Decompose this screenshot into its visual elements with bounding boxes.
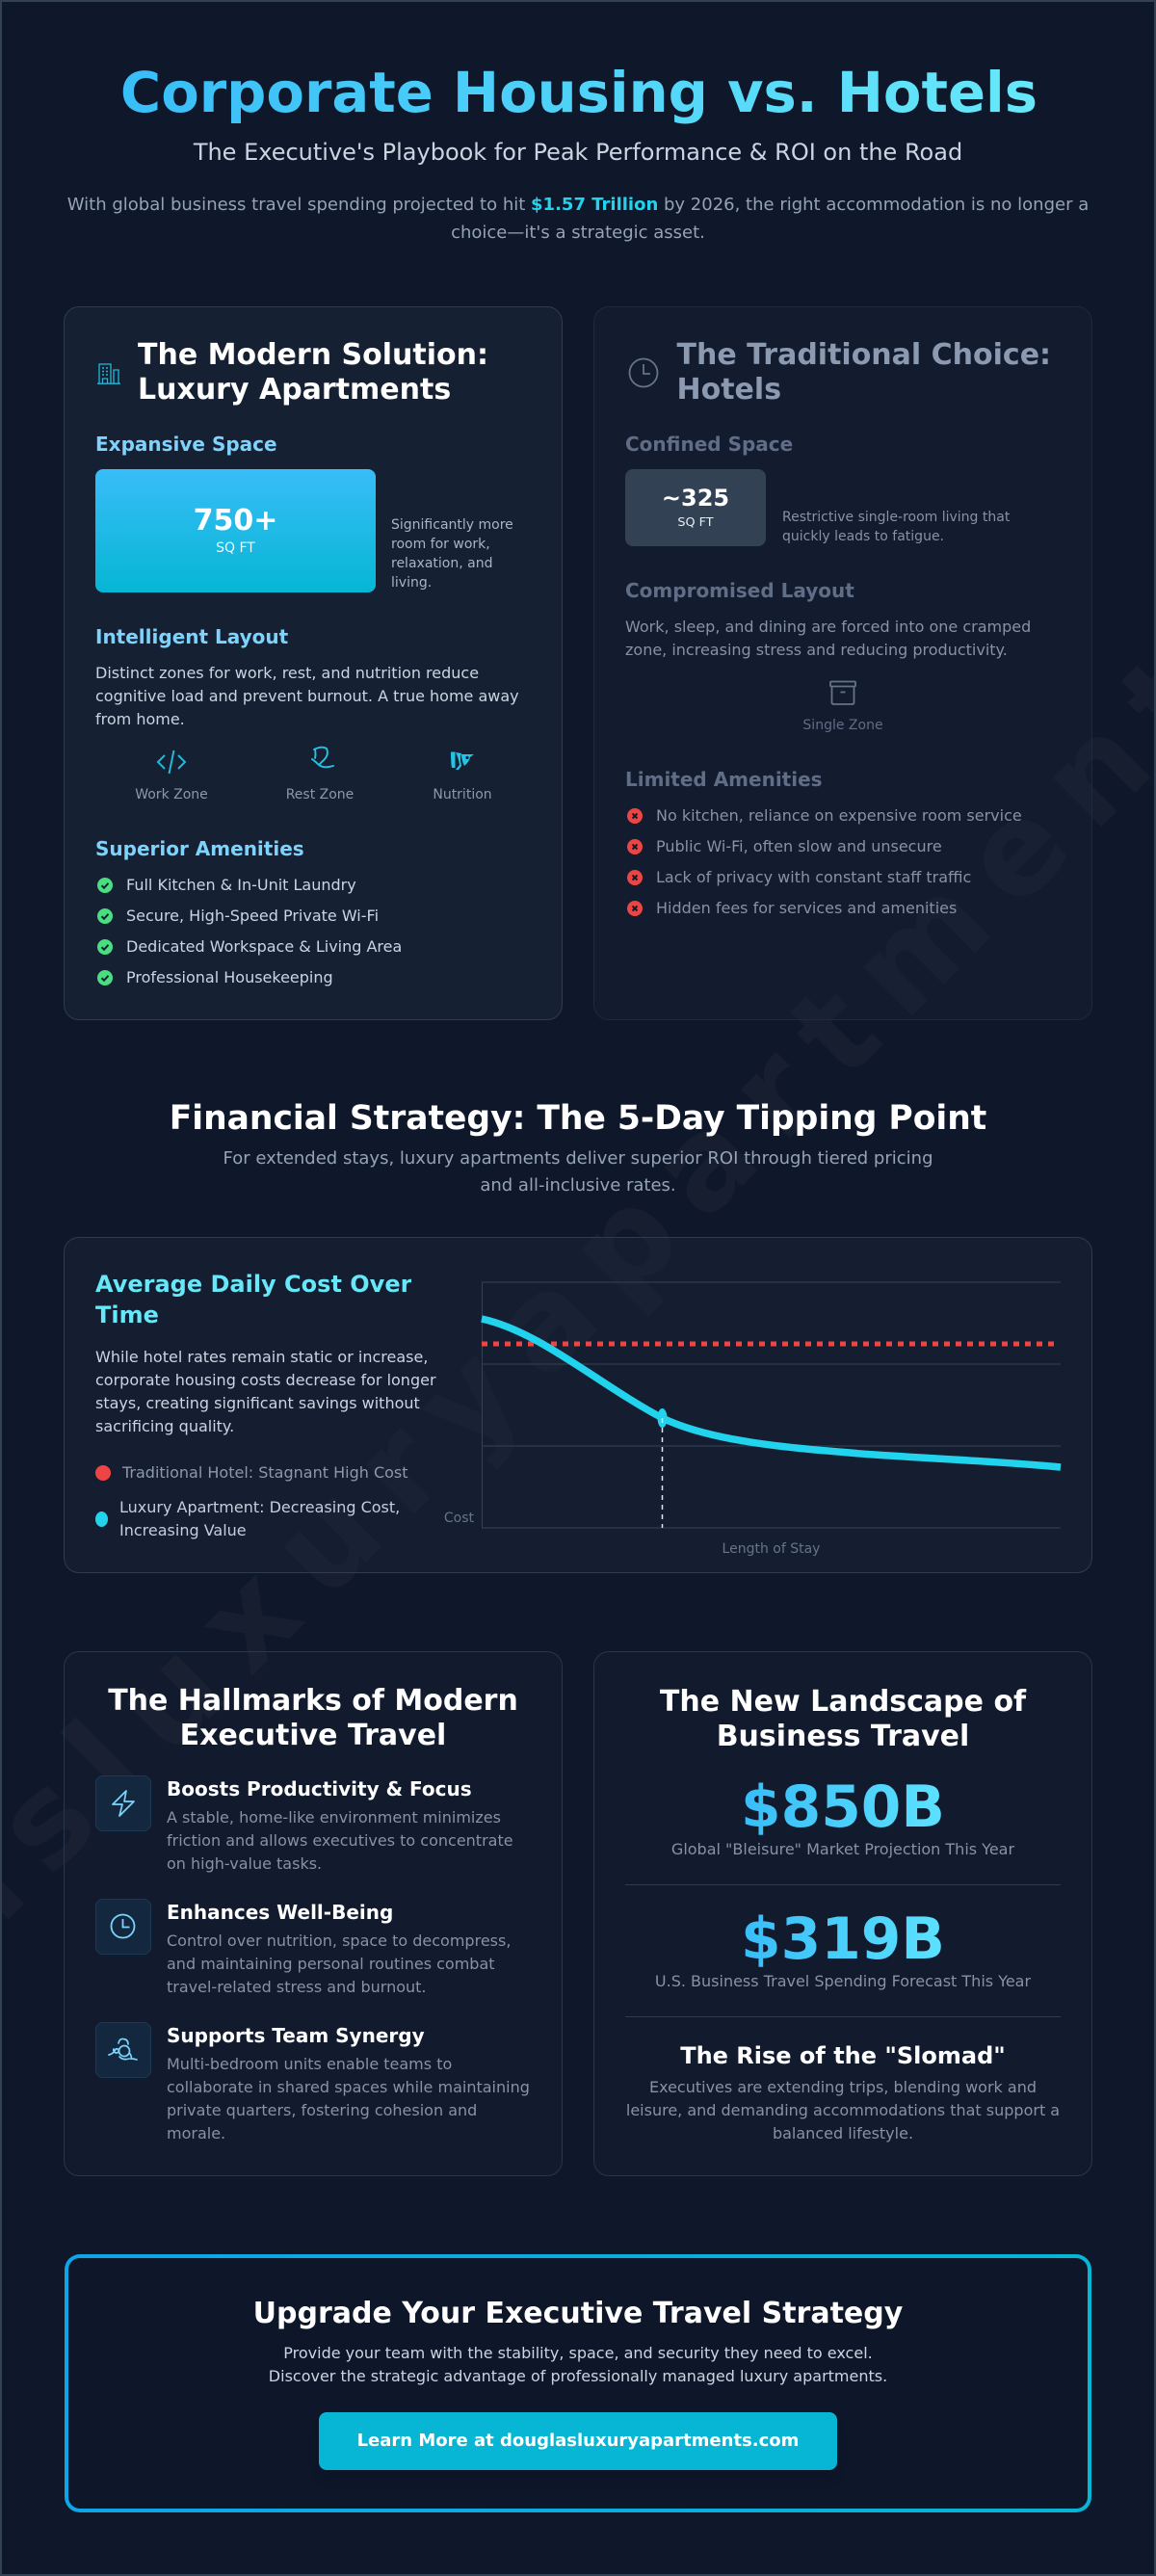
header <box>67 61 1089 243</box>
subtitle: The Executive's Playbook for Peak Performance & ROI on the Road <box>194 139 962 166</box>
stat description: Restrictive single-room living that <box>782 510 1010 525</box>
stat caption: Global "Bleisure" Market Projection This Year <box>671 1840 1014 1858</box>
icon: nutrition <box>451 751 474 770</box>
cta button: Learn More at douglasluxuryapartments.com <box>357 2431 799 2451</box>
axis label: cost: Cost <box>444 1511 474 1526</box>
panel: call to action <box>65 2254 1091 2512</box>
icon: single zone box <box>829 680 856 705</box>
stat box: 325 sq ft <box>625 469 766 546</box>
stat description: room for work, <box>391 537 490 552</box>
intro text: choice—it's a strategic asset. <box>451 223 705 243</box>
panel heading: The Hallmarks of Modern <box>108 1684 518 1718</box>
panel: luxury apartments <box>64 306 563 1020</box>
panel heading: Business Travel <box>717 1719 969 1753</box>
apartment cost curve <box>482 1319 1061 1467</box>
icon: building <box>97 363 120 384</box>
panel heading: Hotels <box>676 373 781 407</box>
item description <box>167 2055 530 2142</box>
section intro <box>223 1148 933 1196</box>
subheading: expansive space: Expansive Space <box>95 433 277 456</box>
section intro: For extended stays, luxury apartments deliver superior ROI through tiered pricing <box>223 1148 933 1169</box>
panel heading <box>676 338 1051 407</box>
panel: cost chart <box>64 1237 1092 1573</box>
legend: apartment: Luxury Apartment: Decreasing Cost, <box>119 1497 400 1516</box>
subheading: superior amenities: Superior Amenities <box>95 837 304 860</box>
item description: friction and allows executives to concentrate <box>167 1831 513 1850</box>
item title: Boosts Productivity & Focus <box>167 1777 472 1801</box>
label: single zone: Single Zone <box>802 718 883 733</box>
item description: Multi-bedroom units enable teams to <box>167 2055 452 2073</box>
tipping point marker <box>657 1408 667 1428</box>
drawback: wi-fi: Public Wi-Fi, often slow and unsecure <box>656 836 942 855</box>
cta text: Discover the strategic advantage of professionally managed luxury apartments. <box>269 2366 887 2385</box>
panel heading: Luxury Apartments <box>138 373 451 407</box>
stat description: relaxation, and <box>391 556 492 571</box>
chart heading <box>95 1269 411 1330</box>
panel: new landscape <box>593 1651 1092 2176</box>
cta button <box>319 2412 837 2470</box>
stat description: Significantly more <box>391 517 513 533</box>
section intro: and all-inclusive rates. <box>480 1175 676 1196</box>
chart description: stays, creating significant savings without <box>95 1393 420 1412</box>
label: work zone: Work Zone <box>135 787 208 802</box>
amenity: kitchen: Full Kitchen & In-Unit Laundry <box>126 875 356 894</box>
icon: clock <box>95 1899 151 1955</box>
item description: and maintaining personal routines combat <box>167 1955 495 1973</box>
panel: hotels <box>593 306 1092 1020</box>
cta text <box>269 2343 887 2385</box>
stat unit: SQ FT <box>216 540 255 556</box>
panel heading: The Modern Solution: <box>138 338 488 372</box>
item description: on high-value tasks. <box>167 1854 322 1873</box>
chart description: While hotel rates remain static or increase, <box>95 1347 428 1366</box>
cta heading: Upgrade Your Executive Travel Strategy <box>253 2297 903 2330</box>
amenity: workspace: Dedicated Workspace & Living Area <box>126 936 402 956</box>
subheading: limited amenities: Limited Amenities <box>625 768 823 791</box>
icon: team <box>95 2022 151 2078</box>
stat description: living. <box>391 575 432 591</box>
label: rest zone: Rest Zone <box>286 787 354 802</box>
subheading: intelligent layout: Intelligent Layout <box>95 625 288 648</box>
layout description <box>95 663 519 728</box>
item title: Supports Team Synergy <box>167 2024 425 2047</box>
panel heading <box>660 1684 1027 1753</box>
legend: apartment <box>95 1497 400 1539</box>
icon: rest zone <box>311 746 334 769</box>
section heading: financial strategy: Financial Strategy: The 5-Day Tipping Point <box>170 1099 986 1138</box>
chart heading: Average Daily Cost Over <box>95 1271 411 1298</box>
subheading: confined space: Confined Space <box>625 433 793 456</box>
layout description: zone, increasing stress and reducing productivity. <box>625 640 1008 659</box>
icon: work zone <box>156 749 187 775</box>
item description: travel-related stress and burnout. <box>167 1978 427 1996</box>
slomad description: leisure, and demanding accommodations that support a <box>626 2100 1060 2119</box>
stat description <box>391 517 513 591</box>
drawback: kitchen: No kitchen, reliance on expensive room service <box>656 805 1022 825</box>
item description <box>167 1808 513 1873</box>
stat caption: U.S. Business Travel Spending Forecast This Year <box>655 1972 1031 1990</box>
panel heading: The Traditional Choice: <box>676 338 1051 372</box>
stat: 850B <box>593 1773 1092 1842</box>
cta text: Provide your team with the stability, space, and security they need to excel. <box>283 2343 873 2362</box>
drawback: privacy: Lack of privacy with constant staff traffic <box>656 867 971 886</box>
item description: Control over nutrition, space to decompress, <box>167 1932 511 1950</box>
stat description: quickly leads to fatigue. <box>782 529 944 544</box>
slomad description: Executives are extending trips, blending work and <box>649 2077 1037 2096</box>
tipping point dashed line <box>661 1418 663 1528</box>
layout description: Distinct zones for work, rest, and nutrition reduce <box>95 663 479 682</box>
stat unit: SQ FT <box>677 515 714 530</box>
icon: clock <box>628 358 659 387</box>
chart description <box>95 1347 436 1435</box>
item description: morale. <box>167 2124 225 2142</box>
layout description: from home. <box>95 709 185 728</box>
item description: A stable, home-like environment minimizes <box>167 1808 501 1827</box>
legend: apartment: Increasing Value <box>119 1520 247 1539</box>
title: Corporate Housing vs. Hotels <box>120 61 1038 125</box>
panel heading <box>138 338 488 407</box>
slomad description: balanced lifestyle. <box>773 2123 913 2142</box>
stat box: 750+ sq ft <box>95 469 376 592</box>
chart description: corporate housing costs decrease for longer <box>95 1370 436 1389</box>
amenity: housekeeping: Professional Housekeeping <box>126 967 333 986</box>
item title: Enhances Well-Being <box>167 1901 393 1924</box>
layout description: Work, sleep, and dining are forced into one cramped <box>625 617 1031 636</box>
stat: 319B <box>593 1905 1092 1974</box>
stat value: ~325 <box>662 485 729 512</box>
intro text: With global business travel spending projected to hit $1.57 Trillion by 2026, the right accommodation is no longer a <box>67 195 1089 215</box>
hotel cost line <box>482 1341 1060 1347</box>
slomad description <box>626 2077 1060 2142</box>
slomad heading: The Rise of the "Slomad" <box>680 2042 1006 2069</box>
stat: 850B: $850B <box>741 1774 945 1841</box>
chart heading: Time <box>95 1301 159 1328</box>
subheading: compromised layout: Compromised Layout <box>625 579 854 602</box>
drawback: fees: Hidden fees for services and amenities <box>656 898 957 917</box>
chart description: sacrificing quality. <box>95 1416 234 1435</box>
intro text <box>67 195 1089 243</box>
panel heading: The New Landscape of <box>660 1684 1026 1719</box>
stat value: 750+ <box>194 504 277 538</box>
chart gridlines <box>482 1282 1061 1528</box>
axis label: length of stay: Length of Stay <box>722 1541 820 1557</box>
legend: hotel: Traditional Hotel: Stagnant High Cost <box>122 1462 408 1482</box>
panel heading <box>108 1684 518 1752</box>
stat description <box>782 510 1010 544</box>
layout description: cognitive load and prevent burnout. A true home away <box>95 686 519 705</box>
layout description <box>625 617 1031 659</box>
item description <box>167 1932 511 1996</box>
label: nutrition: Nutrition <box>433 787 492 802</box>
panel heading: Executive Travel <box>180 1719 446 1752</box>
icon: lightning <box>95 1775 151 1831</box>
item description: collaborate in shared spaces while maintaining <box>167 2078 530 2096</box>
item description: private quarters, fostering cohesion and <box>167 2101 477 2119</box>
stat: 319B: $319B <box>741 1906 945 1973</box>
amenity: wi-fi: Secure, High-Speed Private Wi-Fi <box>126 906 379 925</box>
panel: hallmarks <box>64 1651 563 2176</box>
